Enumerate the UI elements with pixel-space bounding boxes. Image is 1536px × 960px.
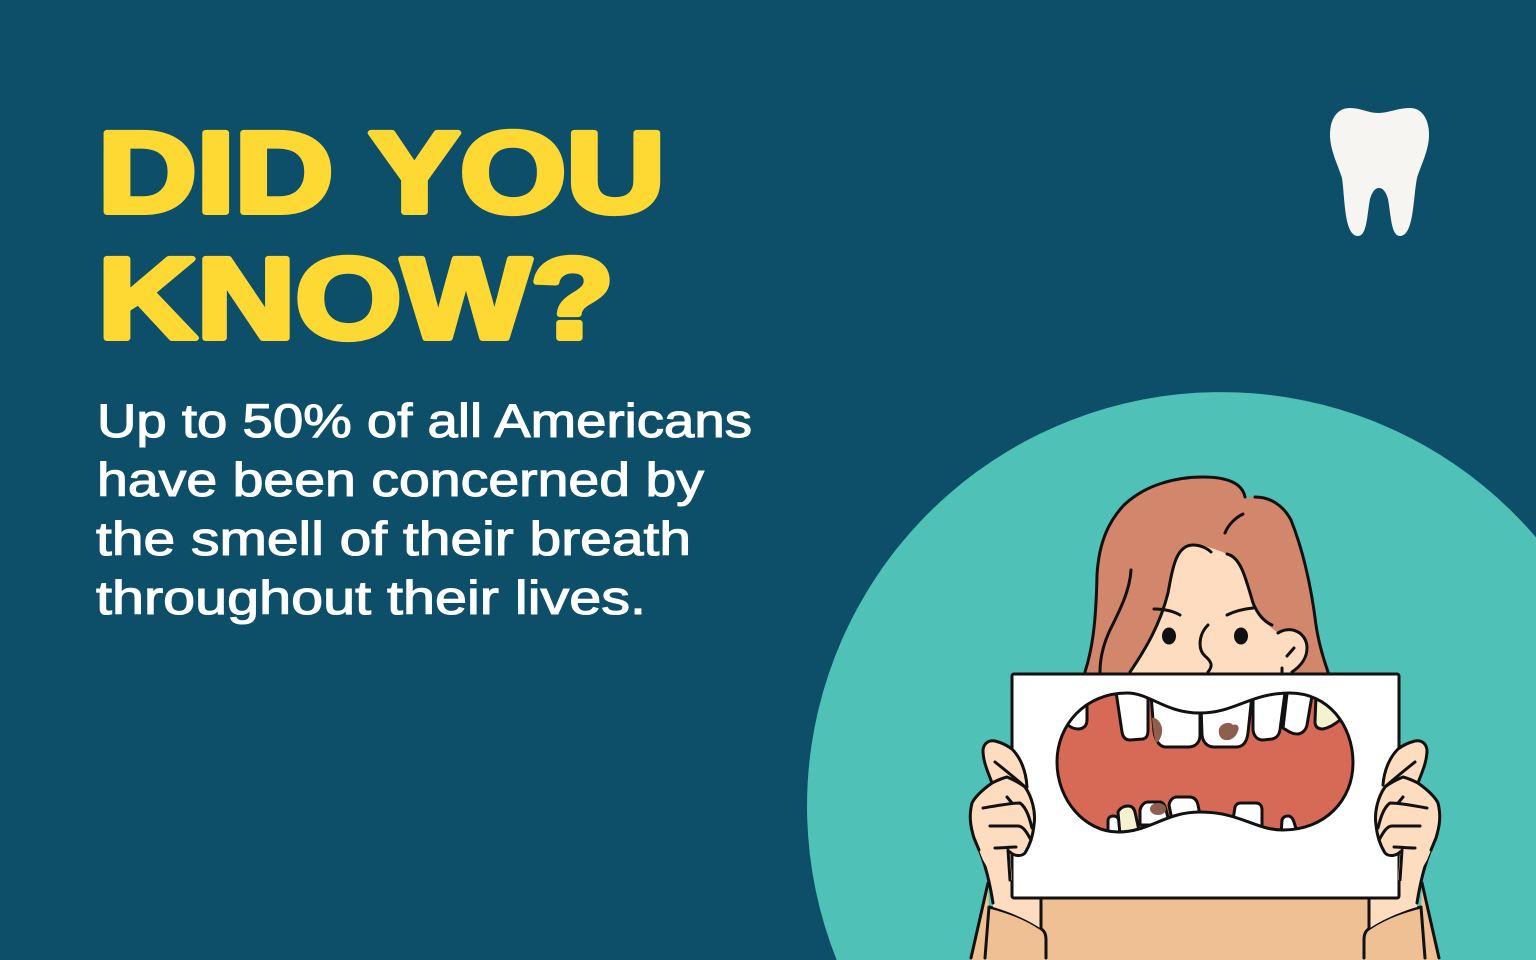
- eyebrows: [1154, 608, 1253, 615]
- statistic text block: Up to 50% of all Americans: [97, 394, 752, 447]
- stains: [1150, 718, 1239, 815]
- statistic text block: throughout their lives.: [96, 571, 646, 624]
- mouth outline: [1057, 693, 1353, 832]
- mouth interior: [1057, 693, 1353, 832]
- statistic text block: [96, 394, 752, 624]
- statistic text block: have been concerned by: [97, 453, 705, 506]
- teeth: [1068, 694, 1340, 830]
- mouth picture: [1057, 685, 1353, 840]
- left arm: [972, 820, 1041, 928]
- face: [1128, 545, 1307, 675]
- right arm: [1369, 820, 1438, 928]
- illustration: woman holding mouth picture: [970, 477, 1440, 960]
- title: did you know: [98, 109, 665, 363]
- icon: tooth: [1330, 108, 1429, 236]
- title: did you know: DID YOU: [98, 109, 665, 237]
- hair: [1085, 477, 1328, 675]
- right hand: [1375, 741, 1440, 890]
- teal circle: [807, 392, 1536, 960]
- statistic text block: the smell of their breath: [96, 512, 691, 565]
- left hand: [970, 741, 1035, 890]
- title: did you know: KNOW?: [98, 235, 614, 363]
- shirt: [970, 883, 1440, 960]
- picture sheet: [1012, 674, 1399, 898]
- eyes: [1162, 628, 1248, 644]
- nose: [1200, 625, 1211, 672]
